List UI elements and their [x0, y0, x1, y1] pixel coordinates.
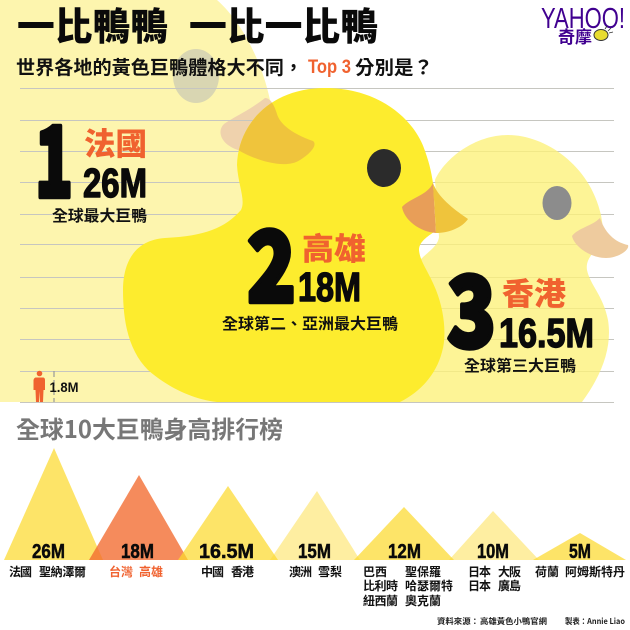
subtitle [16, 53, 433, 80]
rank 1: France [35, 84, 147, 226]
location labels: 法國 [9, 563, 32, 580]
bar: Kaohsiung 18M [89, 475, 188, 560]
duck: Kaohsiung [123, 88, 468, 402]
icon: Hong Kong duck eye [542, 186, 572, 220]
rank 3: Hong Kong: 香港 [502, 269, 566, 314]
icon: Kaohsiung duck beak [402, 183, 468, 233]
location labels: 香港 [231, 563, 254, 580]
logo: Yahoo: 奇摩 [558, 23, 592, 48]
location labels: 巴西 [363, 563, 387, 580]
source credit [437, 616, 625, 627]
bar: 5M [533, 533, 626, 560]
human scale 1.8M [34, 371, 78, 402]
triangle chart [4, 448, 626, 560]
location labels: 荷蘭 [535, 563, 559, 580]
bar: Sydney 15M [270, 491, 360, 560]
rank 2: Kaohsiung: 高雄 [302, 224, 366, 269]
white lower panel [0, 403, 630, 630]
location labels: 中國 [201, 563, 224, 580]
location labels: 阿姆斯特丹 [565, 563, 625, 580]
icon: pale beak overlap [238, 102, 314, 164]
icon: Kaohsiung duck eye [367, 149, 401, 187]
source credit: 高雄黃色小鴨官網 [480, 616, 547, 627]
location labels: 紐西蘭 [363, 592, 398, 609]
rank 3: Hong Kong: 全球第三大巨鴨 [464, 354, 577, 376]
rank 2: Kaohsiung [222, 189, 399, 334]
rank 1: France: 1 [35, 84, 73, 226]
subtitle: 分別是？ [355, 53, 433, 80]
source credit: 製表：Annie Liao [565, 616, 625, 627]
rank 3: Hong Kong: 16.5M [499, 310, 594, 356]
location labels: 澳洲 [289, 563, 312, 580]
logo: Yahoo [541, 3, 625, 48]
icon: person [34, 371, 45, 402]
human scale 1.8M: 1.8M [50, 379, 78, 395]
subtitle: Top 3 [308, 57, 351, 78]
location labels: 比利時 [363, 577, 398, 594]
value labels: 12M [388, 541, 421, 563]
bar: 12M [354, 507, 454, 560]
rank 3: Hong Kong [447, 234, 594, 376]
rank 2: Kaohsiung: 2 [247, 189, 296, 331]
grid lines [20, 88, 614, 402]
duck: Hong Kong [390, 135, 628, 402]
icon: Hong Kong duck beak [572, 218, 628, 258]
value labels: 5M [569, 541, 591, 563]
rank 2: Kaohsiung: 18M [298, 264, 361, 310]
value labels: 26M [32, 541, 65, 563]
value labels [32, 541, 591, 563]
rank 1: France: 全球最大巨鴨 [52, 204, 147, 226]
location labels: 哈瑟爾特 [405, 577, 453, 594]
value labels: 18M [121, 541, 154, 563]
icon: pale duck eye [173, 49, 219, 103]
location labels: 雪梨 [318, 563, 342, 580]
location labels: 聖保羅 [405, 563, 441, 580]
location labels [9, 563, 625, 609]
heading: top 10 ranking: 全球10大巨鴨身高排行榜 [16, 410, 283, 445]
location labels: 聖納澤爾 [39, 563, 86, 580]
background duck: France (pale) [0, 0, 330, 402]
icon: pale duck beak [220, 98, 315, 164]
subtitle: 世界各地的黃色巨鴨體格大不同， [16, 53, 303, 80]
location labels: 台灣 [109, 563, 133, 580]
location labels: 日本 [468, 563, 491, 580]
source credit: 資料來源： [437, 616, 479, 627]
location labels: 日本 [468, 577, 491, 594]
location labels: 大阪 [498, 563, 521, 580]
value labels: 16.5M [199, 541, 254, 563]
value labels: 15M [298, 541, 331, 563]
icon: logo emblem [594, 26, 613, 40]
location labels: 廣島 [498, 577, 521, 594]
bar: France 26M [4, 448, 103, 560]
bar: 10M [449, 511, 539, 560]
bar: Hong Kong 16.5M [178, 486, 278, 560]
title [17, 0, 378, 51]
value labels: 10M [477, 541, 509, 563]
rank 2: Kaohsiung: 全球第二、亞洲最大巨鴨 [222, 312, 399, 334]
rank 1: France: 26M [83, 160, 147, 206]
rank 3: Hong Kong: 3 [447, 234, 496, 376]
location labels: 高雄 [139, 563, 163, 580]
location labels: 奧克蘭 [405, 592, 441, 609]
rank 1: France: 法國 [84, 119, 147, 164]
